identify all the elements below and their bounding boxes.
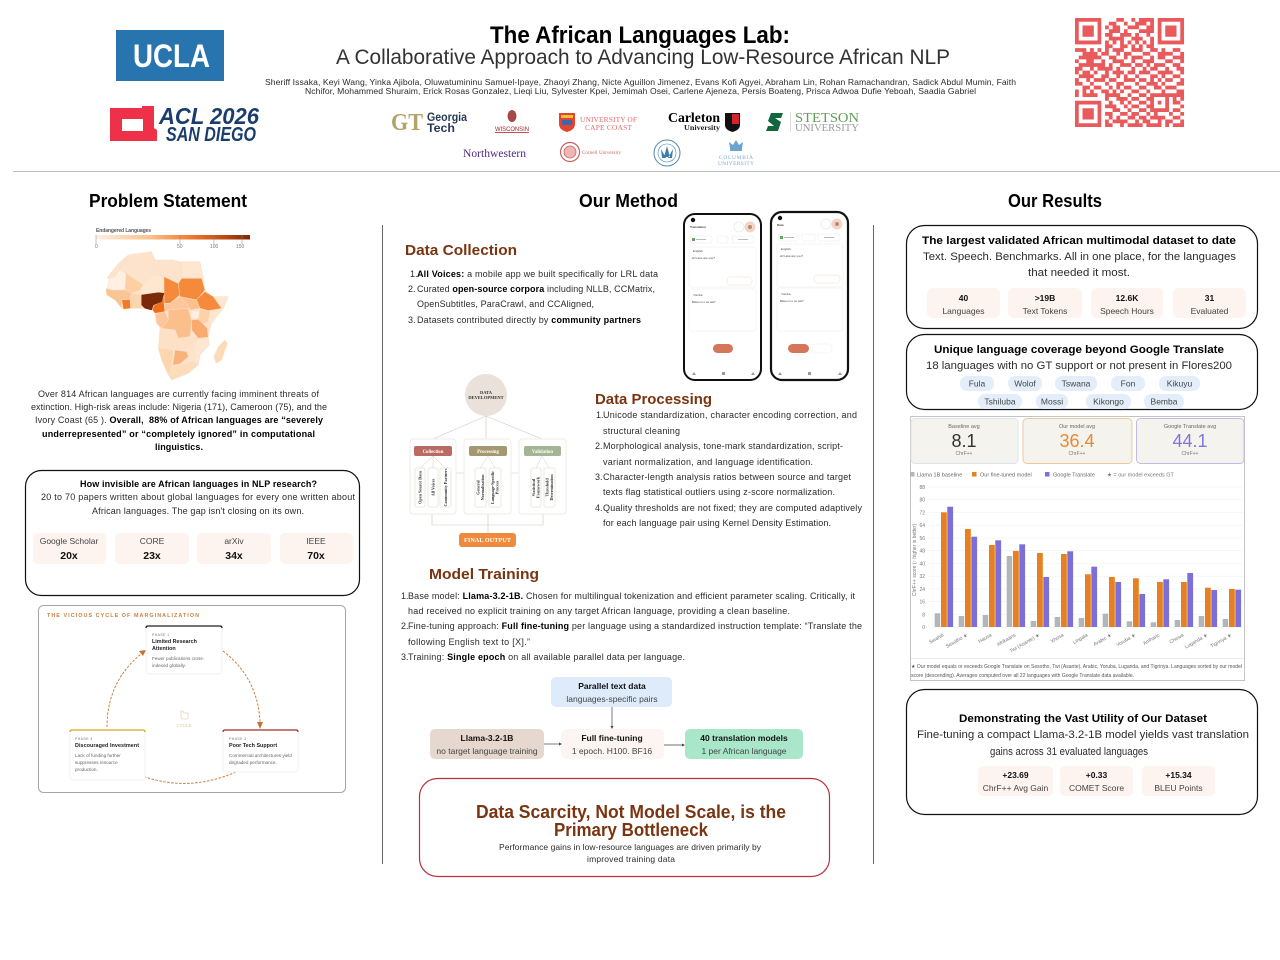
node: parallel text data: languages-specific pairs (566, 694, 658, 704)
node: data development (465, 374, 507, 416)
authors: Nchifor, Mohammed Shuraim, Erick Rosas Gonzalez, Lieqi Liu, Sylvester Kpei, Jemimah Osei, Carlene Ajeneza, Persis Boateng, Prisca Adwoa Dufie Yeboah, Saadia Gabriel (305, 86, 976, 96)
phone: data screen (771, 212, 848, 380)
stat: BLEU points: BLEU Points (1154, 783, 1203, 793)
node: full fine-tuning (561, 729, 664, 759)
group: collection: All Voices (430, 478, 436, 496)
stat: IEEE: 70x (307, 550, 325, 562)
group: validation: Determination (549, 474, 554, 501)
x axis labels: Lingala (1072, 632, 1089, 646)
stat: speech hours: 12.6K (1116, 293, 1139, 303)
panel: dataset utility: Fine-tuning a compact Llama-3.2-1B model yields vast translation (917, 729, 1249, 741)
list: data processing (595, 410, 862, 528)
x axis labels: Yoruba ★ (1115, 632, 1137, 649)
list: data collection: 3. (408, 315, 416, 325)
stat: COMET score: +0.33 (1086, 770, 1108, 780)
y axis labels (912, 485, 925, 631)
stat: ChrF++ gain (978, 766, 1053, 796)
node: final output (459, 533, 516, 547)
stat: arXiv: arXiv (224, 536, 244, 546)
y axis labels: 64 (919, 523, 925, 529)
stat: our model avg: 36.4 (1059, 431, 1095, 451)
phone: translation screen: Yoruba (693, 293, 703, 297)
y axis labels: 56 (919, 536, 925, 542)
node: Llama base model: Llama-3.2-1B (461, 733, 513, 743)
list: data processing: 2. (595, 441, 603, 451)
chips: languages: Fon (1121, 378, 1136, 388)
heading: vicious cycle: THE VICIOUS CYCLE OF MARGINALIZATION (47, 613, 199, 619)
panel: invisibility in NLP research (26, 470, 360, 596)
stat: ChrF++ gain: ChrF++ Avg Gain (983, 783, 1049, 793)
logo: Georgia Tech: GT (391, 110, 423, 136)
node: 40 translation models: 1 per African language (701, 746, 787, 756)
list: data processing: variant normalization, and language identification. (603, 457, 813, 467)
x axis labels: Luganda ★ (1184, 632, 1209, 650)
logo: University of Cape Coast: UNIVERSITY OF (580, 115, 637, 124)
panel: dataset summary: that needed it most. (1028, 267, 1130, 279)
x axis labels: Twi (Asante) ★ (1009, 632, 1041, 655)
stat: Google Scholar (33, 533, 106, 564)
text: papers gap (41, 492, 355, 516)
phone: translation screen: Translation (690, 225, 706, 229)
title: The African Languages Lab: (490, 22, 790, 49)
x axis labels: Arabic ★ (1093, 632, 1113, 648)
logo: blue seal (654, 140, 680, 166)
logo: Georgia Tech: Georgia (427, 112, 468, 124)
column: Our Method (401, 191, 862, 876)
stat: CORE: CORE (140, 536, 165, 546)
logo: Georgia Tech: Tech (427, 123, 455, 135)
stat: CORE: 23x (143, 550, 161, 562)
logo: ACL 2026 San Diego: SAN DIEGO (166, 124, 256, 146)
card: phase 1: Fewer publications cross- (152, 656, 205, 661)
list: data processing: 1. (596, 410, 604, 420)
subtitle: A Collaborative Approach to Advancing Low-Resource African NLP (336, 46, 950, 69)
text: problem description: extinction. High-risk areas include: Nigeria (171), Cameroon (75), and the (31, 402, 327, 412)
callout: data scarcity: Data Scarcity, Not Model Scale, is the (476, 802, 786, 822)
card: phase 1: Attention (152, 646, 176, 652)
panel: language coverage (906, 334, 1258, 410)
chart footnote: score (descending). Averages computed over all 22 languages with Google Translate data available. (911, 673, 1134, 679)
text: problem description: underrepresented” or “completely ignored” in computational (42, 429, 315, 439)
heading: Our Method: Our Method (579, 191, 678, 211)
logo: Cornell University (560, 142, 622, 162)
arrow: phase 3 to phase 1 (107, 650, 146, 727)
stat: Google Scholar: 20x (60, 550, 78, 562)
node: data development: DATA (480, 390, 493, 395)
Google Translate bars (947, 507, 1241, 627)
y axis labels: 48 (919, 549, 925, 555)
x axis labels (928, 632, 1233, 655)
list: data collection: 2. (408, 284, 416, 294)
list: model training: had received no explicit training on any target African language, providing a clean baseline. (408, 606, 790, 616)
x axis labels: Hausa (977, 632, 993, 645)
card: phase 2: PHASE 2 (229, 737, 247, 741)
group: processing: General (476, 479, 480, 495)
list: data processing: 4. (595, 503, 603, 513)
chips: languages: Wolof (1014, 378, 1036, 388)
stat: IEEE: IEEE (306, 536, 326, 546)
heading: Data Processing: Data Processing (595, 391, 712, 408)
stat: BLEU points (1142, 766, 1215, 796)
stat: speech hours: Speech Hours (1100, 306, 1154, 316)
card: phase 1: indexed globally. (152, 663, 186, 668)
text: papers gap: 20 to 70 papers written about global languages for every one written about (41, 492, 355, 502)
QR code (1075, 18, 1184, 127)
y axis labels: 16 (919, 600, 925, 606)
panel: dataset utility: Demonstrating the Vast Utility of Our Dataset (959, 713, 1207, 725)
card: phase 3: Lack of funding further (75, 753, 121, 758)
card: phase 3: production. (75, 767, 98, 772)
icon: cycle centre (176, 711, 192, 728)
logo: Stetson University: UNIVERSITY (795, 123, 859, 134)
list: data processing: Character-length analysis ratios between source and target (603, 472, 851, 482)
stat: evaluated: 31 (1205, 293, 1214, 303)
list: data processing: texts flag statistical outliers using z-score normalization. (603, 487, 835, 497)
stat: CORE (115, 533, 189, 564)
stat: COMET score (1060, 766, 1133, 796)
logo: Columbia University (718, 140, 754, 167)
y axis labels: 40 (919, 562, 925, 568)
text: problem description: linguistics. (155, 442, 203, 452)
list: data collection: OpenSubtitles, ParaCrawl, and CCAligned, (417, 299, 594, 309)
stat: COMET score: COMET Score (1069, 783, 1124, 793)
node: 40 translation models: 40 translation models (700, 733, 788, 743)
stat: speech hours (1091, 288, 1163, 318)
node: parallel text data (551, 677, 672, 707)
list: data processing: structural cleaning (603, 426, 680, 436)
y axis labels: 80 (919, 498, 925, 504)
group: processing: Normalization (480, 474, 485, 500)
x axis labels: Amharic (1142, 632, 1161, 647)
map legend: 50 (177, 244, 183, 250)
node: Llama base model: no target language training (436, 746, 538, 756)
chips: languages: Kikongo (1093, 396, 1124, 406)
stat: text tokens: Text Tokens (1023, 306, 1067, 316)
logo: Northwestern: Northwestern (463, 148, 526, 160)
group: processing: Language-Specific (490, 471, 495, 504)
stat: languages: Languages (942, 306, 985, 316)
bar chart (912, 485, 1243, 655)
group: validation: Framework (536, 476, 540, 498)
stat: our model avg: Our model avg (1059, 424, 1095, 430)
group: collection (410, 439, 456, 514)
list: model training: following English text to [X].” (408, 637, 530, 647)
group: validation (519, 439, 566, 514)
stat: our model avg: ChrF++ (1069, 451, 1086, 457)
list: data processing: for each language pair using Kernel Density Estimation. (603, 518, 831, 528)
list: data processing: Unicode standardization, character encoding correction, and (603, 410, 857, 420)
node: 40 translation models (685, 729, 803, 759)
panel: dataset summary: The largest validated African multimodal dataset to date (922, 235, 1236, 247)
card: phase 3: suppresses resource (75, 760, 118, 765)
column: Our Results (906, 191, 1258, 814)
panel: vicious cycle (38, 606, 346, 792)
phone: data screen: Yoruba (781, 292, 791, 296)
logo: Carleton University (668, 110, 740, 132)
stat: Google Translate avg: Google Translate avg (1164, 424, 1216, 430)
column: Problem Statement (26, 191, 360, 792)
list: data processing: Morphological analysis, tone-mark standardization, script- (603, 441, 843, 451)
x axis labels: Xhosa (1050, 632, 1065, 645)
y axis labels: 72 (919, 510, 925, 516)
icon: cycle centre: CYCLE (176, 723, 192, 728)
phone: data screen: Hi! How are you? (780, 254, 803, 258)
card: phase 1: Limited Research (152, 639, 197, 645)
stat: Google Translate avg: 44.1 (1172, 431, 1208, 451)
logo: University of Cape Coast: CAPE COAST (585, 123, 632, 132)
chips: languages (960, 376, 1200, 409)
stat: Google Translate avg: ChrF++ (1182, 451, 1199, 457)
node: full fine-tuning: Full fine-tuning (581, 733, 643, 743)
node: full fine-tuning: 1 epoch. H100. BF16 (572, 746, 652, 756)
list: data collection: 1. (410, 269, 418, 279)
callout: data scarcity: Primary Bottleneck (554, 820, 709, 840)
list: data collection: All Voices: a mobile app we built specifically for LRL data (417, 269, 658, 279)
arrow: phase 2 to phase 3 (145, 772, 236, 783)
stat: baseline avg: Baseline avg (948, 424, 980, 430)
arrow: Llama to fine-tuning (544, 742, 562, 746)
phone: translation screen: English (693, 249, 703, 253)
y axis labels: 24 (919, 587, 925, 593)
logo: Wisconsin (495, 110, 529, 133)
our model bars (941, 512, 1235, 627)
phone: translation screen: Hi! How are you? (692, 256, 715, 260)
logo: Wisconsin: WISCONSIN (495, 126, 529, 133)
group: validation: Threshold (544, 478, 550, 497)
stat: text tokens: >19B (1035, 293, 1055, 303)
text: problem description: Ivory Coast (65 ). Overall, 88% of African languages are “severely (35, 415, 323, 425)
group: collection: Collection (423, 450, 444, 455)
phone: data screen: English (781, 247, 791, 251)
list: data processing: Quality thresholds are not fixed; they are computed adaptively (603, 503, 862, 513)
logo: University of Cape Coast (559, 113, 637, 132)
chart legend: ★ = our model exceeds GT (1107, 472, 1174, 478)
stat: baseline avg (911, 418, 1018, 464)
stat: IEEE (280, 533, 353, 564)
baseline bars (935, 556, 1228, 627)
x axis labels: Chewa (1169, 632, 1185, 646)
list: model training (401, 591, 862, 662)
card: phase 3: PHASE 3 (75, 737, 93, 741)
stat: languages (927, 288, 1000, 318)
authors: Sheriff Issaka, Keyi Wang, Yinka Ajibola, Oluwatumininu Samuel-Ipaye, Zhaoyi Zhang, Nicte Aguillon Jimenez, Evans Kofi Agyei, Abraham Lin, Rohan Ramachandran, Sadick Abdul Mumin, Faith (265, 77, 1016, 87)
list: model training: Fine-tuning approach: Full fine-tuning per language using a standardized instruction template: “Translate the (408, 621, 862, 631)
chips: languages: Bemba (1151, 396, 1178, 406)
text: papers gap: African languages. The gap isn't closing on its own. (92, 506, 304, 516)
logo: Columbia University: UNIVERSITY (718, 161, 754, 167)
chart legend: Our fine-tuned model (980, 472, 1032, 478)
chart legend: Llama 1B baseline (917, 472, 962, 478)
card: phase 1: PHASE 1 (152, 633, 170, 637)
callout: data scarcity (420, 778, 830, 876)
list: model training: 3. (401, 652, 409, 662)
group: processing (464, 439, 511, 514)
logo: ACL 2026 San Diego: ACL 2026 (158, 103, 259, 129)
card: phase 3: Discouraged Investment (75, 743, 139, 749)
group: validation: Statistical (531, 478, 536, 496)
stat: ChrF++ gain: +23.69 (1002, 770, 1029, 780)
stat: arXiv (197, 533, 271, 564)
header (110, 18, 1184, 167)
x axis labels: Afrikaans (996, 632, 1017, 648)
panel: ChrF++ chart (910, 416, 1244, 680)
card: phase 1 (146, 626, 222, 674)
list: data collection: Datasets contributed directly by community partners (417, 315, 641, 325)
card: phase 3 (70, 730, 145, 780)
x axis labels: Swahili (928, 633, 945, 646)
heading: Problem Statement: Problem Statement (89, 191, 247, 211)
logo: Georgia Tech (391, 110, 468, 136)
text: problem description: Over 814 African languages are currently facing imminent threats of (38, 389, 319, 399)
stat: languages: 40 (959, 293, 968, 303)
logo: Carleton University: University (684, 124, 721, 132)
node: parallel text data: Parallel text data (578, 681, 646, 691)
heading: How invisible: How invisible are African languages in NLP research? (80, 479, 317, 489)
group: processing: Process (494, 480, 500, 494)
y axis labels: 0 (922, 625, 925, 631)
list: model training: Training: Single epoch on all available parallel data per language. (408, 652, 685, 662)
map legend (95, 228, 250, 250)
logo: UCLA: UCLA (133, 38, 210, 74)
y axis labels: 8 (922, 612, 925, 618)
chart footnote: ★ Our model equals or exceeds Google Translate on Sesotho, Twi (Asante), Arabic, Yoruba, Luganda, and Tigrinya. Languages sorted by our model (911, 664, 1242, 670)
panel: dataset summary (906, 226, 1258, 328)
map legend: 150 (236, 244, 245, 250)
map: Africa choropleth (106, 252, 228, 380)
callout: data scarcity: Performance gains in low-resource languages are driven primarily by (499, 842, 762, 852)
card: phase 2: degraded performance. (229, 760, 277, 765)
callout: data scarcity: improved training data (587, 854, 675, 864)
phone: data screen: Báwo ni o se wà? (780, 299, 804, 303)
arrow: parallel data to fine-tuning (610, 707, 614, 729)
y axis labels: 88 (919, 485, 925, 491)
panel: dataset summary: Text. Speech. Benchmarks. All in one place, for the languages (923, 251, 1237, 263)
y axis labels: 32 (919, 574, 925, 580)
map legend: 0 (95, 244, 98, 250)
stat: baseline avg: ChrF++ (956, 451, 973, 457)
list: data collection (408, 269, 658, 325)
heading: Our Results: Our Results (1008, 191, 1102, 211)
list: data collection: Curated open-source corpora including NLLB, CCMatrix, (417, 284, 655, 294)
logo: Cornell University: Cornell University (582, 151, 622, 156)
card: phase 2 (223, 730, 298, 772)
group: collection: Open Source Data (418, 470, 422, 504)
chips: languages: Kikuyu (1167, 378, 1193, 388)
arrow: phase 1 to phase 2 (223, 651, 263, 729)
chips: languages: Fula (969, 378, 986, 388)
list: model training: 2. (401, 621, 409, 631)
stat: our model avg (1023, 418, 1132, 464)
logo: Columbia University: COLUMBIA (719, 155, 753, 161)
y axis labels: ChrF++ score (↑ higher is better) (912, 524, 918, 596)
logo: ACL 2026 San Diego (110, 103, 259, 146)
list: model training: Base model: Llama-3.2-1B. Chosen for multilingual tokenization and efficient parameter scaling. Critically, it (408, 591, 855, 601)
chart footnote (911, 664, 1242, 679)
heading: Data Collection: Data Collection (405, 242, 517, 259)
node: final output: FINAL OUTPUT (464, 537, 512, 544)
flowchart: training pipeline (430, 677, 803, 759)
map legend: Endangered Languages (96, 228, 151, 234)
group: collection: Community Partners (443, 468, 448, 507)
node: data development: DEVELOPMENT (468, 395, 504, 400)
diagram: data development (410, 374, 566, 547)
text: problem description (31, 389, 327, 452)
stat: baseline avg: 8.1 (951, 431, 977, 451)
logo: Stetson University (766, 111, 859, 134)
chips: languages: Tshiluba (984, 396, 1016, 406)
authors (265, 77, 1016, 96)
group: processing: Processing (477, 450, 499, 455)
group: validation: Validation (532, 450, 553, 455)
panel: dataset utility (906, 690, 1258, 814)
logo: Stetson University: STETSON (795, 111, 859, 126)
stat: arXiv: 34x (225, 550, 243, 562)
card: phase 2: Commercial architectures yield (229, 753, 292, 758)
logo: UCLA (116, 30, 224, 81)
phone: data screen: Data (777, 223, 784, 227)
map legend: 100 (210, 244, 219, 250)
arrow: fine-tuning to models (664, 744, 685, 746)
panel: dataset utility: gains across 31 evaluated languages (990, 746, 1148, 758)
panel: language coverage: 18 languages with no GT support or not present in Flores200 (926, 360, 1232, 372)
stat: Google Scholar: Google Scholar (40, 536, 98, 546)
node: Llama base model (430, 729, 544, 759)
stat: BLEU points: +15.34 (1165, 770, 1192, 780)
list: model training: 1. (401, 591, 409, 601)
logo: Carleton University: Carleton (668, 110, 720, 125)
chips: languages: Mossi (1041, 396, 1063, 406)
card: phase 2: Poor Tech Support (229, 743, 277, 749)
phone: translation screen (684, 214, 761, 380)
chart legend: Google Translate (1053, 472, 1095, 478)
chart legend (910, 472, 1174, 478)
panel: language coverage: Unique language coverage beyond Google Translate (934, 344, 1224, 356)
stat: evaluated: Evaluated (1191, 306, 1229, 316)
heading: Model Training: Model Training (429, 566, 539, 583)
phone: translation screen: Báwo ni o se wà? (692, 300, 716, 304)
stat: Google Translate avg (1136, 418, 1244, 464)
x axis labels: Sesotho ★ (945, 632, 969, 650)
stat: evaluated (1173, 288, 1246, 318)
list: data processing: 3. (595, 472, 603, 482)
x axis labels: Tigrinya ★ (1210, 632, 1233, 649)
chips: languages: Tswana (1062, 378, 1091, 388)
stat: text tokens (1008, 288, 1082, 318)
